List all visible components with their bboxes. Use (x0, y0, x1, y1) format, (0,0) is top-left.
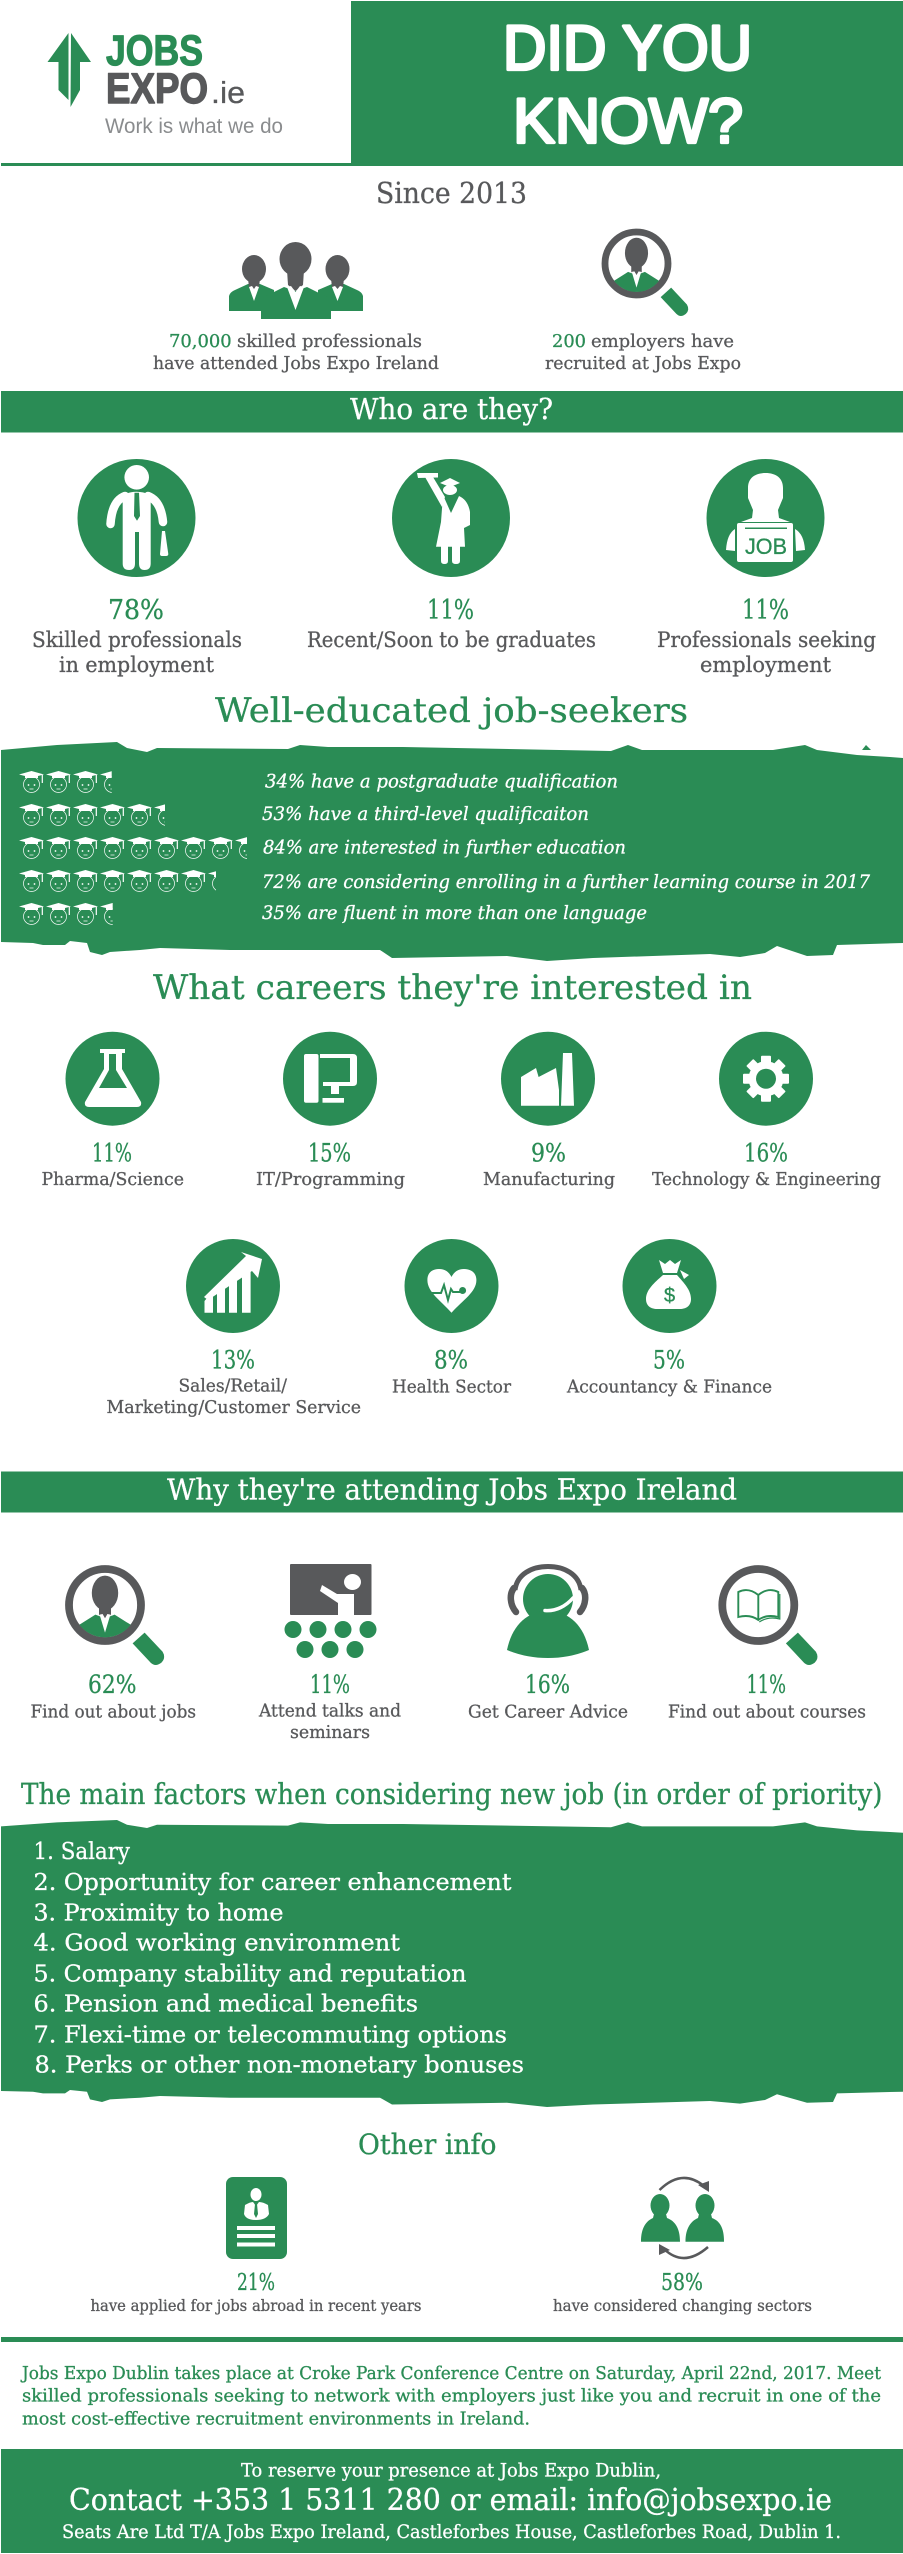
graduate pictogram row 72% (19, 870, 233, 892)
icon: factory (501, 1032, 595, 1126)
icon: heart with pulse (404, 1239, 498, 1333)
logo word EXPO: EXPO (106, 65, 208, 113)
icon: CV document (226, 2177, 287, 2259)
stat: sales retail marketing: Sales/Retail/ (178, 1376, 288, 1396)
stat rows text: 35% are fluent in more than one language (262, 902, 647, 924)
icon: classroom presenter (284, 1564, 376, 1658)
stat: IT programming (256, 1138, 405, 1190)
heading: well-educated job-seekers: Well-educated job-seekers (215, 691, 688, 731)
stat: attend talks: 11% (310, 1670, 350, 1699)
heading: careers: What careers they're interested in (153, 968, 752, 1008)
icon: group of professionals (229, 242, 363, 319)
list items: 6. Pension and medical benefits (34, 1992, 418, 2018)
text: 200 employers: recruited at Jobs Expo (545, 353, 741, 374)
icon: money bag: $ (664, 1285, 675, 1307)
title line 2: KNOW? (513, 86, 743, 156)
stat: technology and engineering: Technology & Engineering (652, 1169, 881, 1190)
stat: find out about courses: 11% (746, 1670, 786, 1699)
panel: priority list (1, 1820, 903, 2107)
text: 70,000 skilled professionals: 70,000 (169, 331, 232, 352)
banner: who are they: Who are they? (350, 392, 553, 426)
stat rows text: 84% are interested in further education (263, 836, 626, 858)
icon: changing sectors (641, 2178, 724, 2258)
list items: 3. Proximity to home (34, 1900, 284, 1926)
stat: manufacturing: 9% (531, 1138, 566, 1168)
stat: find out about jobs: Find out about jobs (30, 1702, 196, 1722)
stat: pharma science: Pharma/Science (42, 1169, 184, 1190)
icon: job seeker in circle: JOB (745, 534, 787, 559)
icon: employer magnifier (605, 232, 688, 316)
stat: 11% graduates (307, 595, 596, 652)
stat: attend talks (258, 1670, 401, 1743)
stat: accountancy and finance: 5% (653, 1346, 685, 1374)
stat: changing sectors (553, 2270, 812, 2315)
stat: changing sectors: have considered changing sectors (553, 2296, 812, 2315)
graduate pictogram row 53% (19, 804, 179, 826)
stat: health sector: 8% (434, 1346, 468, 1374)
stat: 11% professionals seeking employment: 11% (742, 595, 789, 626)
text block: event description: most cost-effective recruitment environments in Ireland. (22, 2408, 530, 2430)
icon: flask (66, 1032, 160, 1126)
stat rows text: 34% have a postgraduate qualification (265, 770, 618, 792)
banner: why attending: Why they're attending Jobs Expo Ireland (167, 1472, 737, 1506)
stat: manufacturing: Manufacturing (483, 1169, 615, 1190)
stat: find out about jobs: 62% (88, 1670, 136, 1699)
icon: money bag (622, 1239, 716, 1333)
text block: event description: skilled professionals seeking to network with employers just like you and recruit in one of the (22, 2386, 881, 2406)
list items: 1. Salary (34, 1839, 130, 1865)
stat: attend talks: Attend talks and (258, 1700, 401, 1722)
text: 70,000 skilled professionals: have attended Jobs Expo Ireland (153, 353, 439, 374)
graduate pictogram row 84% (19, 837, 260, 858)
stat: sales retail marketing (106, 1346, 361, 1418)
stat: applied abroad (90, 2270, 422, 2315)
footer: contact panel: To reserve your presence at Jobs Expo Dublin, (241, 2460, 661, 2482)
text: 70,000 skilled professionals: skilled professionals (237, 331, 422, 352)
heading: since 2013: Since 2013 (376, 176, 527, 210)
panel: education stats (1, 742, 903, 961)
text: 200 employers: employers have (591, 331, 734, 352)
stat: technology and engineering: 16% (744, 1138, 788, 1168)
icon: growth chart (186, 1239, 280, 1333)
stat: health sector (392, 1346, 511, 1398)
list items (34, 1839, 524, 2078)
stat: attend talks: seminars (290, 1722, 370, 1743)
footer: contact panel: Seats Are Ltd T/A Jobs Expo Ireland, Castleforbes House, Castleforbes Road, Dublin 1. (62, 2521, 841, 2543)
stat: find out about courses (668, 1670, 866, 1722)
stat: manufacturing (483, 1138, 615, 1190)
stat: accountancy and finance: Accountancy & Finance (566, 1376, 772, 1398)
icon: magnifier person (69, 1569, 164, 1665)
stat: 78% skilled professionals: Skilled professionals (32, 628, 242, 652)
stat: health sector: Health Sector (392, 1376, 511, 1398)
logo suffix .ie: .ie (211, 75, 245, 110)
banner: who are they (1, 391, 903, 432)
icon: graduate in circle (392, 459, 510, 577)
icon: magnifier with book (722, 1569, 817, 1665)
stat rows text: 53% have a third-level qualificaiton (262, 803, 589, 825)
stat: career advice: 16% (525, 1670, 570, 1699)
icon: professional in circle (78, 459, 196, 577)
stat: IT programming: IT/Programming (256, 1169, 405, 1190)
graduate pictogram row 35% (19, 903, 125, 924)
icon: job seeker in circle (706, 459, 824, 577)
list items: 2. Opportunity for career enhancement (34, 1870, 512, 1896)
header: did you know panel (351, 1, 903, 166)
text: 200 employers: 200 (552, 331, 586, 352)
stat: find out about jobs (30, 1670, 196, 1722)
stat: career advice (468, 1670, 628, 1722)
icon: headset advisor (507, 1566, 589, 1658)
stat: find out about courses: Find out about courses (668, 1702, 866, 1722)
header: logo panel (1, 27, 351, 166)
stat rows text: 72% are considering enrolling in a further learning course in 2017 (262, 871, 871, 893)
graduate pictogram row 34% (19, 771, 112, 793)
stat: 11% professionals seeking employment: Professionals seeking (657, 628, 876, 652)
stat: sales retail marketing: Marketing/Customer Service (106, 1397, 361, 1418)
stat: 11% graduates: Recent/Soon to be graduates (307, 628, 596, 652)
icon: gear (719, 1032, 813, 1126)
stat: pharma science: 11% (92, 1138, 132, 1168)
title line 1: DID YOU (503, 14, 752, 84)
text block: event description (20, 2363, 882, 2430)
stat: technology and engineering (652, 1138, 881, 1190)
stat: 11% professionals seeking employment (657, 595, 876, 677)
list items: 5. Company stability and reputation (34, 1962, 467, 1988)
stat: applied abroad: 21% (237, 2270, 275, 2296)
stat: career advice: Get Career Advice (468, 1702, 628, 1722)
icon: logo arrow (48, 33, 91, 107)
logo tagline: Work is what we do (105, 115, 283, 138)
stat: 78% skilled professionals: 78% (108, 595, 164, 626)
heading: other info: Other info (358, 2128, 496, 2161)
text: 70,000 skilled professionals (153, 331, 439, 374)
text: 200 employers (545, 331, 741, 374)
stat: accountancy and finance (566, 1346, 772, 1398)
stat: 78% skilled professionals: in employment (59, 653, 215, 677)
list items: 7. Flexi-time or telecommuting options (34, 2022, 507, 2048)
logo word JOBS: JOBS (106, 27, 203, 75)
stat: 11% professionals seeking employment: employment (700, 653, 832, 677)
stat: sales retail marketing: 13% (211, 1346, 255, 1374)
icon: computer (283, 1032, 377, 1126)
footer: contact panel (1, 2449, 903, 2553)
list items: 4. Good working environment (34, 1930, 401, 1956)
stat: pharma science (42, 1138, 184, 1190)
stat: applied abroad: have applied for jobs abroad in recent years (90, 2296, 422, 2315)
stat: 11% graduates: 11% (427, 595, 474, 626)
footer: contact panel: Contact +353 1 5311 280 or email: info@jobsexpo.ie (69, 2483, 832, 2518)
stat: changing sectors: 58% (661, 2270, 703, 2296)
stat: 78% skilled professionals (32, 595, 242, 677)
list items: 8. Perks or other non-monetary bonuses (34, 2052, 524, 2078)
stat rows text (262, 770, 871, 924)
banner: why attending (1, 1472, 903, 1512)
stat: IT programming: 15% (308, 1138, 351, 1168)
